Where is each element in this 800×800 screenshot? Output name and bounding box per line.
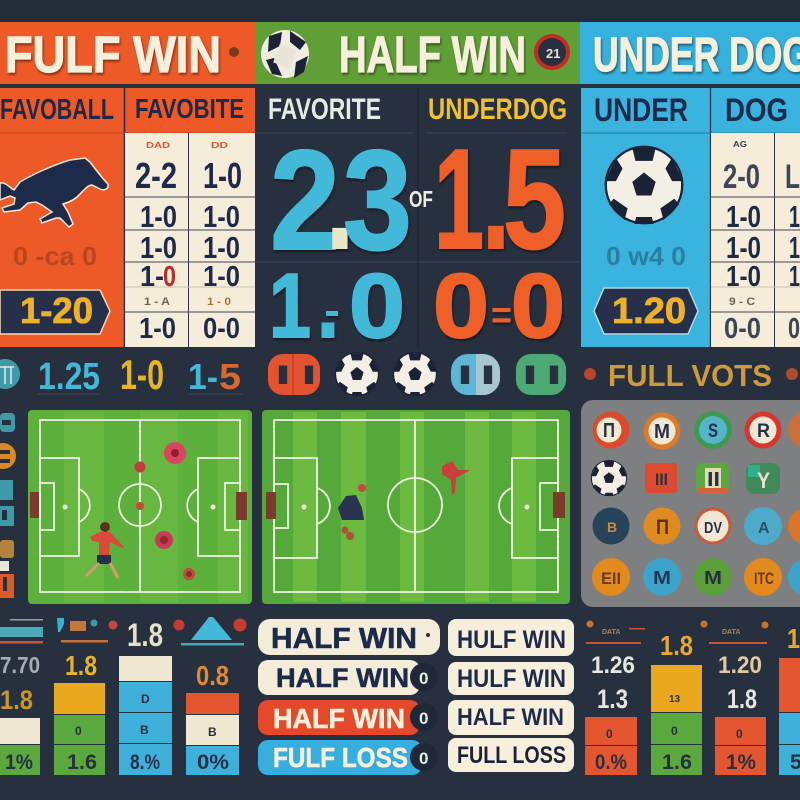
pill: half win: HULF WIN [457,665,566,693]
score: 0-0: 0 [433,256,489,357]
score: 1-0: . [317,256,339,357]
bar chart: left: 0.8 [196,660,229,691]
badge row 1: R [757,421,770,442]
panel: half win header: 21 [546,46,560,61]
bar chart: right: 0.% [595,751,627,774]
heading: favorite: FAVOBITE [135,93,244,124]
score table: 1-0 [726,199,761,234]
player red [442,461,470,495]
odds row: left: 1-0 [120,351,164,398]
bar chart: right: 13 [669,694,681,705]
pill: half win: HALF WIN [276,663,409,693]
big number: 2.3: 3 [343,121,412,280]
score: 0-0: 0 [511,256,565,357]
small legend rules: DATA [602,629,620,636]
pill: half win: HALF WIN [457,704,564,731]
odds row: left: 1- [188,356,218,397]
panel: half win header: HALF WIN [339,26,526,83]
odds pill: green: I [522,360,538,390]
score table: AG [733,140,747,149]
icon: horse [0,158,108,227]
big number: 2.3: 2 [270,121,340,280]
panel: full win header: FULF WIN [5,26,221,83]
icon: ball [335,352,379,396]
bar chart: right: 1.3 [597,684,628,714]
badge row 3: A [758,520,770,537]
score table: DAD [146,141,170,150]
score table: 2-2 [135,155,177,196]
red markers [134,442,195,580]
heading: favorite: FAVORITE [268,93,381,126]
badge row 2: III [655,470,668,489]
badge row 2: II [707,469,720,491]
chart: pitch diagram 2 [262,410,570,604]
player [86,522,124,578]
pill: full loss: FULF LOSS [273,742,408,773]
heading: under: UNDER [594,92,688,128]
odds row: left: 1.25 [38,356,100,398]
outcome pills: column 2 [448,619,574,772]
odds pill: green: I [546,360,562,390]
goal left [30,492,39,518]
goal right [236,492,247,520]
badge row 4: M [704,568,722,588]
badge row 3: DV [704,520,722,537]
big number: 1.5: 5 [503,120,566,279]
panel: underdog table [581,88,800,347]
panel: favorite table [0,88,255,347]
big number: 1.5: . [482,120,510,279]
badge row 4: M [653,568,671,588]
odds pill: orange: I [275,360,291,390]
bar chart: left: B [140,723,149,737]
bar chart: right [585,620,800,775]
small label: 0 w4 0 [606,241,686,271]
bar chart: left: 1.8 [0,685,33,715]
score table: 1 - A [144,296,170,308]
bar chart: left: 1.8 [127,617,163,653]
odds pill: blue: I [480,360,496,390]
score table [125,133,255,347]
badge row 1: S [708,421,718,442]
score table: 1 - 0 [207,296,231,308]
score table: 1- [140,261,164,293]
score table: 0-0 [203,313,240,345]
pill: full loss [448,738,574,772]
panel: centre comparison [256,88,580,357]
big number: 1.5 [434,120,566,279]
pill: half win [258,660,438,695]
pill: full loss: FULL LOSS [457,742,566,769]
panel: badge grid [581,400,800,607]
bar chart: right: 1.6 [662,751,692,774]
score table: 1-0 [203,155,242,196]
big number: 1.5: 1 [434,120,484,279]
bar chart: left: 1.8 [65,650,97,681]
big number: 2.3 [270,121,412,280]
odds pill: green [516,354,566,395]
score table: 0-0 [724,313,761,345]
score table: 1-0 [726,230,761,265]
pill: half win: HULF WIN [457,626,566,654]
score table: 2-0 [723,158,760,196]
heading: favball: FAVOBALL [0,94,114,126]
badge row 1 [592,411,800,450]
bar chart: left: 0% [197,751,229,774]
small legend rules [0,617,246,646]
bar chart: left: 8.% [130,751,160,774]
bar chart: right: 0 [736,727,743,741]
odds pill: 1.20 [612,290,686,331]
bar chart: right: 0 [606,727,613,741]
score table [711,133,800,347]
bar chart: left: 1.6 [67,751,97,774]
odds pill: orange [268,354,320,395]
small legend rules [586,620,768,644]
odds row: left: 5 [219,356,241,397]
odds pill [0,290,110,334]
bar chart: left: 0 [75,724,82,738]
badge row 1: Π [603,420,615,442]
bar chart: left: D [141,692,150,706]
small label: 0 -ca 0 [13,241,97,271]
score table: DD [211,141,228,150]
goal left [266,492,276,519]
score table: 1-0 [140,199,177,234]
score: 1-0 [269,256,405,357]
bar chart: left [0,617,246,775]
pill: half win: 0 [419,669,428,688]
odds pill: 1-20 [20,290,93,331]
pill: half win red: HALF WIN [273,703,405,734]
outcome pills: column 1 [258,619,440,775]
badge row 2 [591,460,780,496]
odds pill [594,288,698,334]
badge row 3: Π [656,516,669,539]
bar chart: right: 1.8 [727,684,757,714]
heading: full vots: FULL VOTS [608,358,772,393]
badge row 4: ITC [754,569,774,588]
bar chart: right: 1.20 [718,652,762,679]
score: 0-0 [433,256,565,357]
score: 0-0: = [491,295,512,337]
score table: 1-0 [139,313,176,345]
bar chart: left: 7.70 [0,652,40,678]
small legend rules: DATA [722,629,740,636]
left icon strip [0,413,16,598]
bar chart: right: 1% [726,751,756,774]
score table: 1-0 [203,230,240,265]
pill: half win red [258,700,438,735]
score table: 1-0 [726,261,761,293]
pill: half win red: 0 [419,709,428,728]
panel: half win header [255,22,580,84]
badge row 4 [592,558,800,596]
icon: ball [393,352,437,396]
score: 1-0: 0 [349,256,405,357]
pill: full loss: 0 [419,749,428,768]
player dark [338,484,366,540]
score table: 1-0 [203,261,240,293]
pill: half win: HALF WIN [271,623,417,655]
goal right [553,492,565,518]
odds row: left [0,351,243,398]
badge row 1: M [654,421,670,443]
bar chart: right: 1.26 [591,652,635,679]
odds pill: orange: I [301,360,317,390]
score table: 1-0 [140,230,177,265]
icon: soccer ball [605,146,683,224]
badge row 2: Y [757,468,770,493]
score table: 9 - C [729,296,755,308]
big number: 2.3: . [325,121,355,280]
bar chart: right: 0 [671,724,678,738]
chart: pitch diagram 1 [28,410,252,604]
bar chart: left: B [208,725,217,739]
pill: half win [258,619,440,655]
odds pill: blue [451,354,500,395]
heading: underdog: UNDERDOG [428,93,567,126]
badge row 3: B [607,519,617,535]
badge row 4: EII [601,569,621,588]
badge row 3 [592,507,800,545]
pill: half win [448,619,574,656]
score table: 1-0 [203,199,240,234]
bar chart: left: 1% [5,751,33,774]
label: of: OF [409,186,433,212]
bar chart: right: 1.8 [660,630,693,661]
heading: dog: DOG [725,92,788,128]
score table: 0 [163,261,176,293]
odds pill: blue: I [457,360,473,390]
score: 1-0: 1 [269,256,311,357]
